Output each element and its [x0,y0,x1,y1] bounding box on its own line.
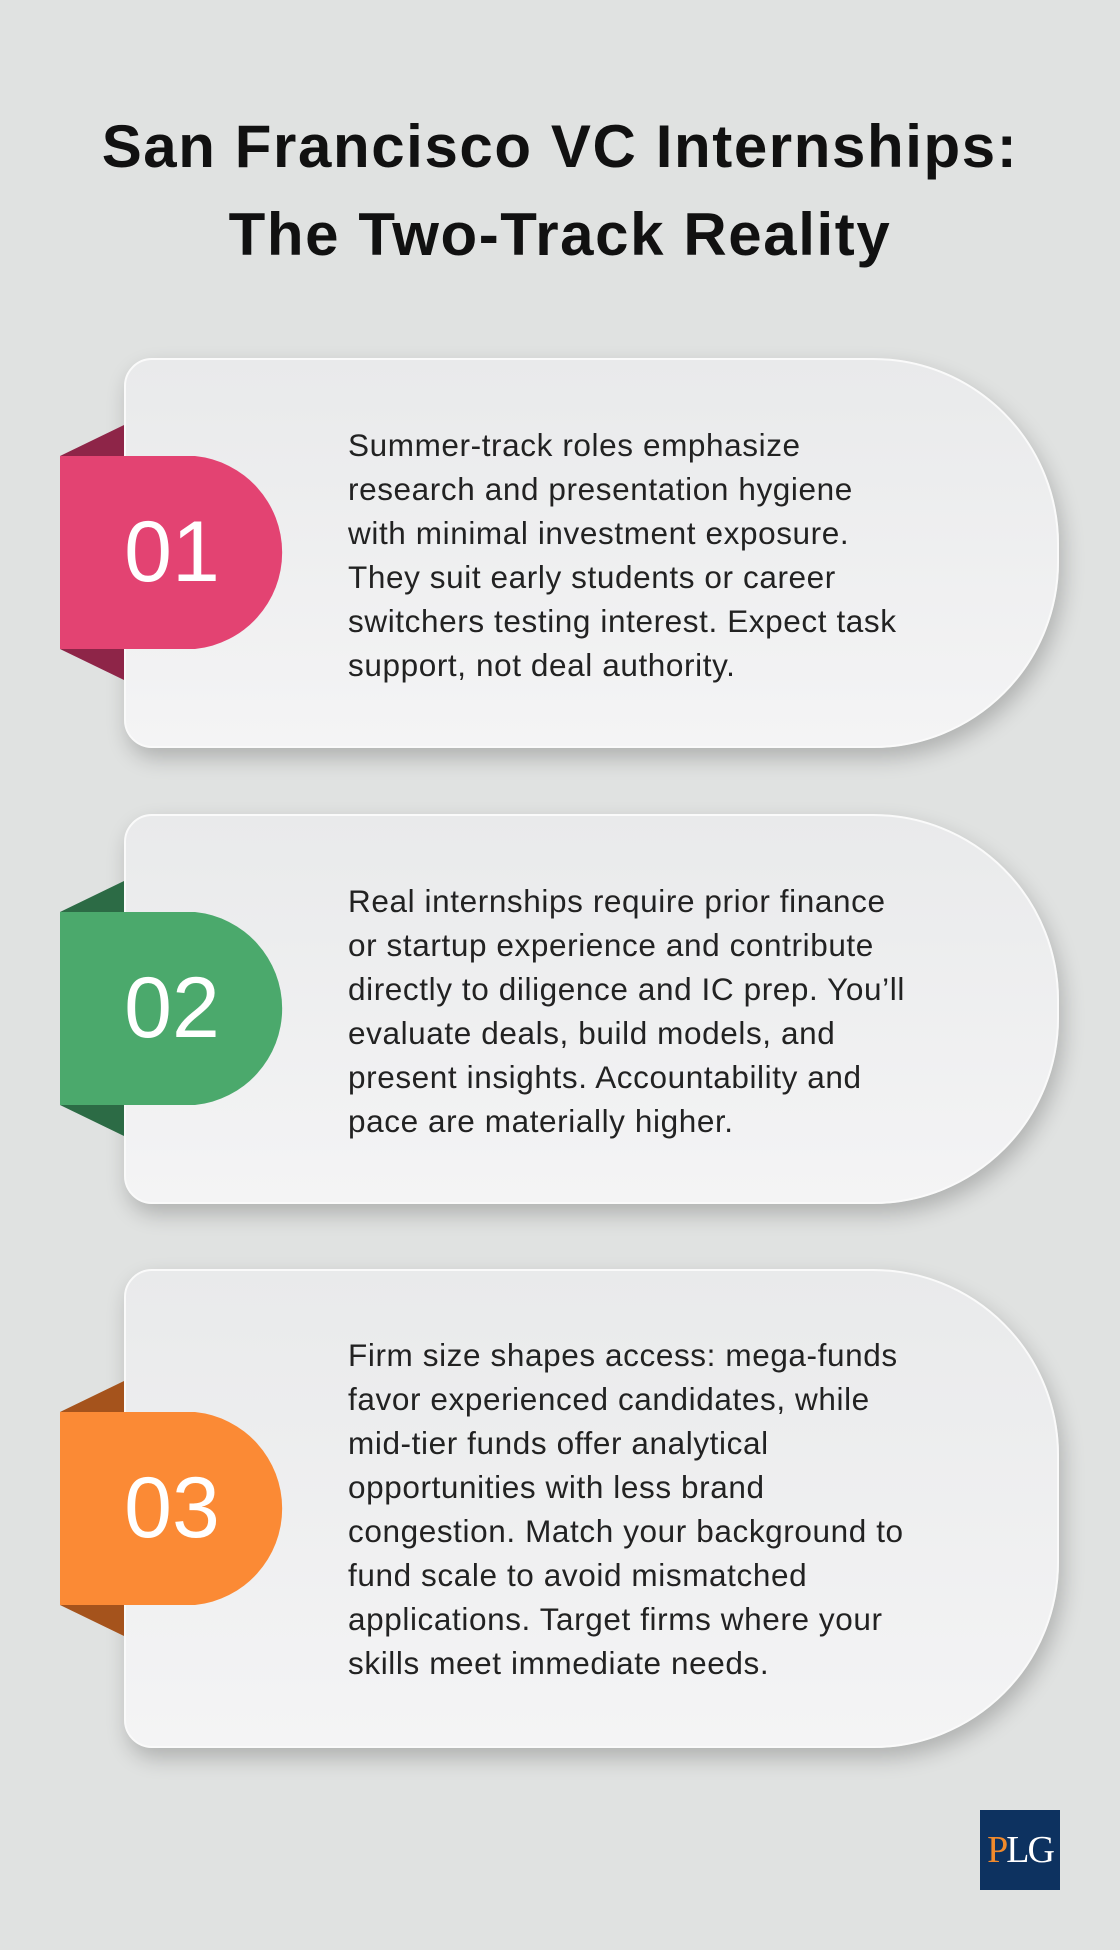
text 1: support, not deal authority. [348,647,735,683]
tab 3 [60,1381,282,1636]
text 3: applications. Target firms where your [348,1601,883,1637]
text 3: favor experienced candidates, while [348,1381,870,1417]
title: The Two-Track Reality [229,201,891,268]
panel: card 2 [124,814,1059,1204]
text 3: congestion. Match your background to [348,1513,904,1549]
text 3: fund scale to avoid mismatched [348,1557,807,1593]
logo [980,1810,1060,1890]
tab 2 [60,881,282,1136]
panel: card 1 [124,358,1059,748]
logo: PLG [987,1829,1053,1871]
number 01: 01 [124,504,220,600]
text 1: They suit early students or career [348,559,836,595]
text 1: research and presentation hygiene [348,471,853,507]
text 3: skills meet immediate needs. [348,1645,769,1681]
panel: card 3 [124,1269,1059,1748]
number 02: 02 [124,960,220,1056]
text 3: opportunities with less brand [348,1469,765,1505]
text 1: switchers testing interest. Expect task [348,603,897,639]
text 1: Summer-track roles emphasize [348,427,801,463]
text 2 [348,883,905,1139]
text 3: Firm size shapes access: mega-funds [348,1337,898,1373]
text 1 [348,427,897,683]
text 2: pace are materially higher. [348,1103,734,1139]
title [102,113,1018,268]
tab 1 [60,425,282,680]
text 2: evaluate deals, build models, and [348,1015,835,1051]
text 1: with minimal investment exposure. [348,515,849,551]
text 3 [348,1337,904,1681]
text 2: directly to diligence and IC prep. You’ll [348,971,905,1007]
title: San Francisco VC Internships: [102,113,1018,180]
text 3: mid-tier funds offer analytical [348,1425,769,1461]
text 2: or startup experience and contribute [348,927,874,963]
text 2: present insights. Accountability and [348,1059,862,1095]
text 2: Real internships require prior finance [348,883,886,919]
number 03: 03 [124,1460,220,1556]
